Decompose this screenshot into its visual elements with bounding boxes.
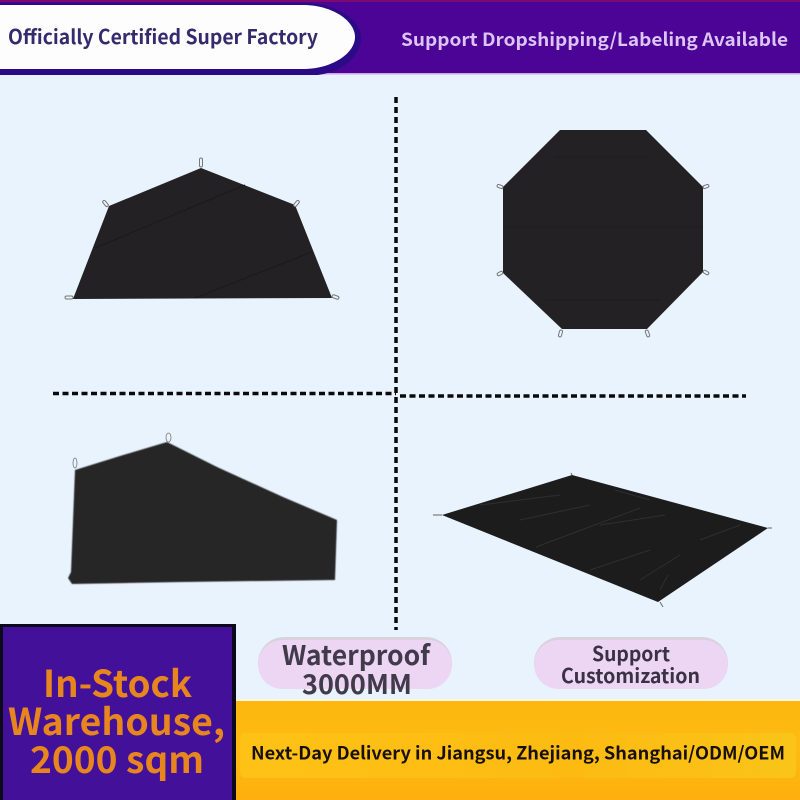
badge: factory certification: Officially Certified Super Factory [8, 21, 318, 50]
waterproof badge: Waterproof [282, 634, 431, 673]
top banner [0, 0, 800, 75]
product: octagon groundsheet [497, 130, 709, 337]
product: pentagon groundsheet [65, 158, 339, 300]
yellow delivery banner [236, 699, 800, 800]
warehouse text: Warehouse, [8, 692, 225, 746]
vertical dashed divider [394, 97, 398, 630]
loops [65, 158, 339, 300]
warehouse text: In-Stock [43, 654, 193, 708]
customization badge [534, 637, 728, 689]
pill shadow [0, 3, 361, 75]
horizontal dashed divider right [400, 394, 746, 398]
product: asymmetric groundsheet [68, 433, 337, 584]
banner text: dropshipping: Support Dropshipping/Labeling Available [401, 26, 788, 52]
warehouse text [8, 654, 225, 784]
customization badge: Support [592, 638, 671, 667]
delivery text: Next-Day Delivery in Jiangsu, Zhejiang, Shanghai/ODM/OEM [251, 740, 785, 766]
warehouse panel [0, 624, 236, 800]
badge: factory certification [0, 5, 355, 69]
waterproof badge: 3000MM [302, 663, 412, 702]
warehouse text: 2000 sqm [30, 730, 204, 784]
customization badge: Customization [561, 660, 700, 689]
product: rectangular groundsheet in perspective [433, 473, 772, 607]
waterproof badge [258, 634, 452, 702]
loops [497, 184, 709, 337]
horizontal dashed divider left [53, 392, 396, 395]
